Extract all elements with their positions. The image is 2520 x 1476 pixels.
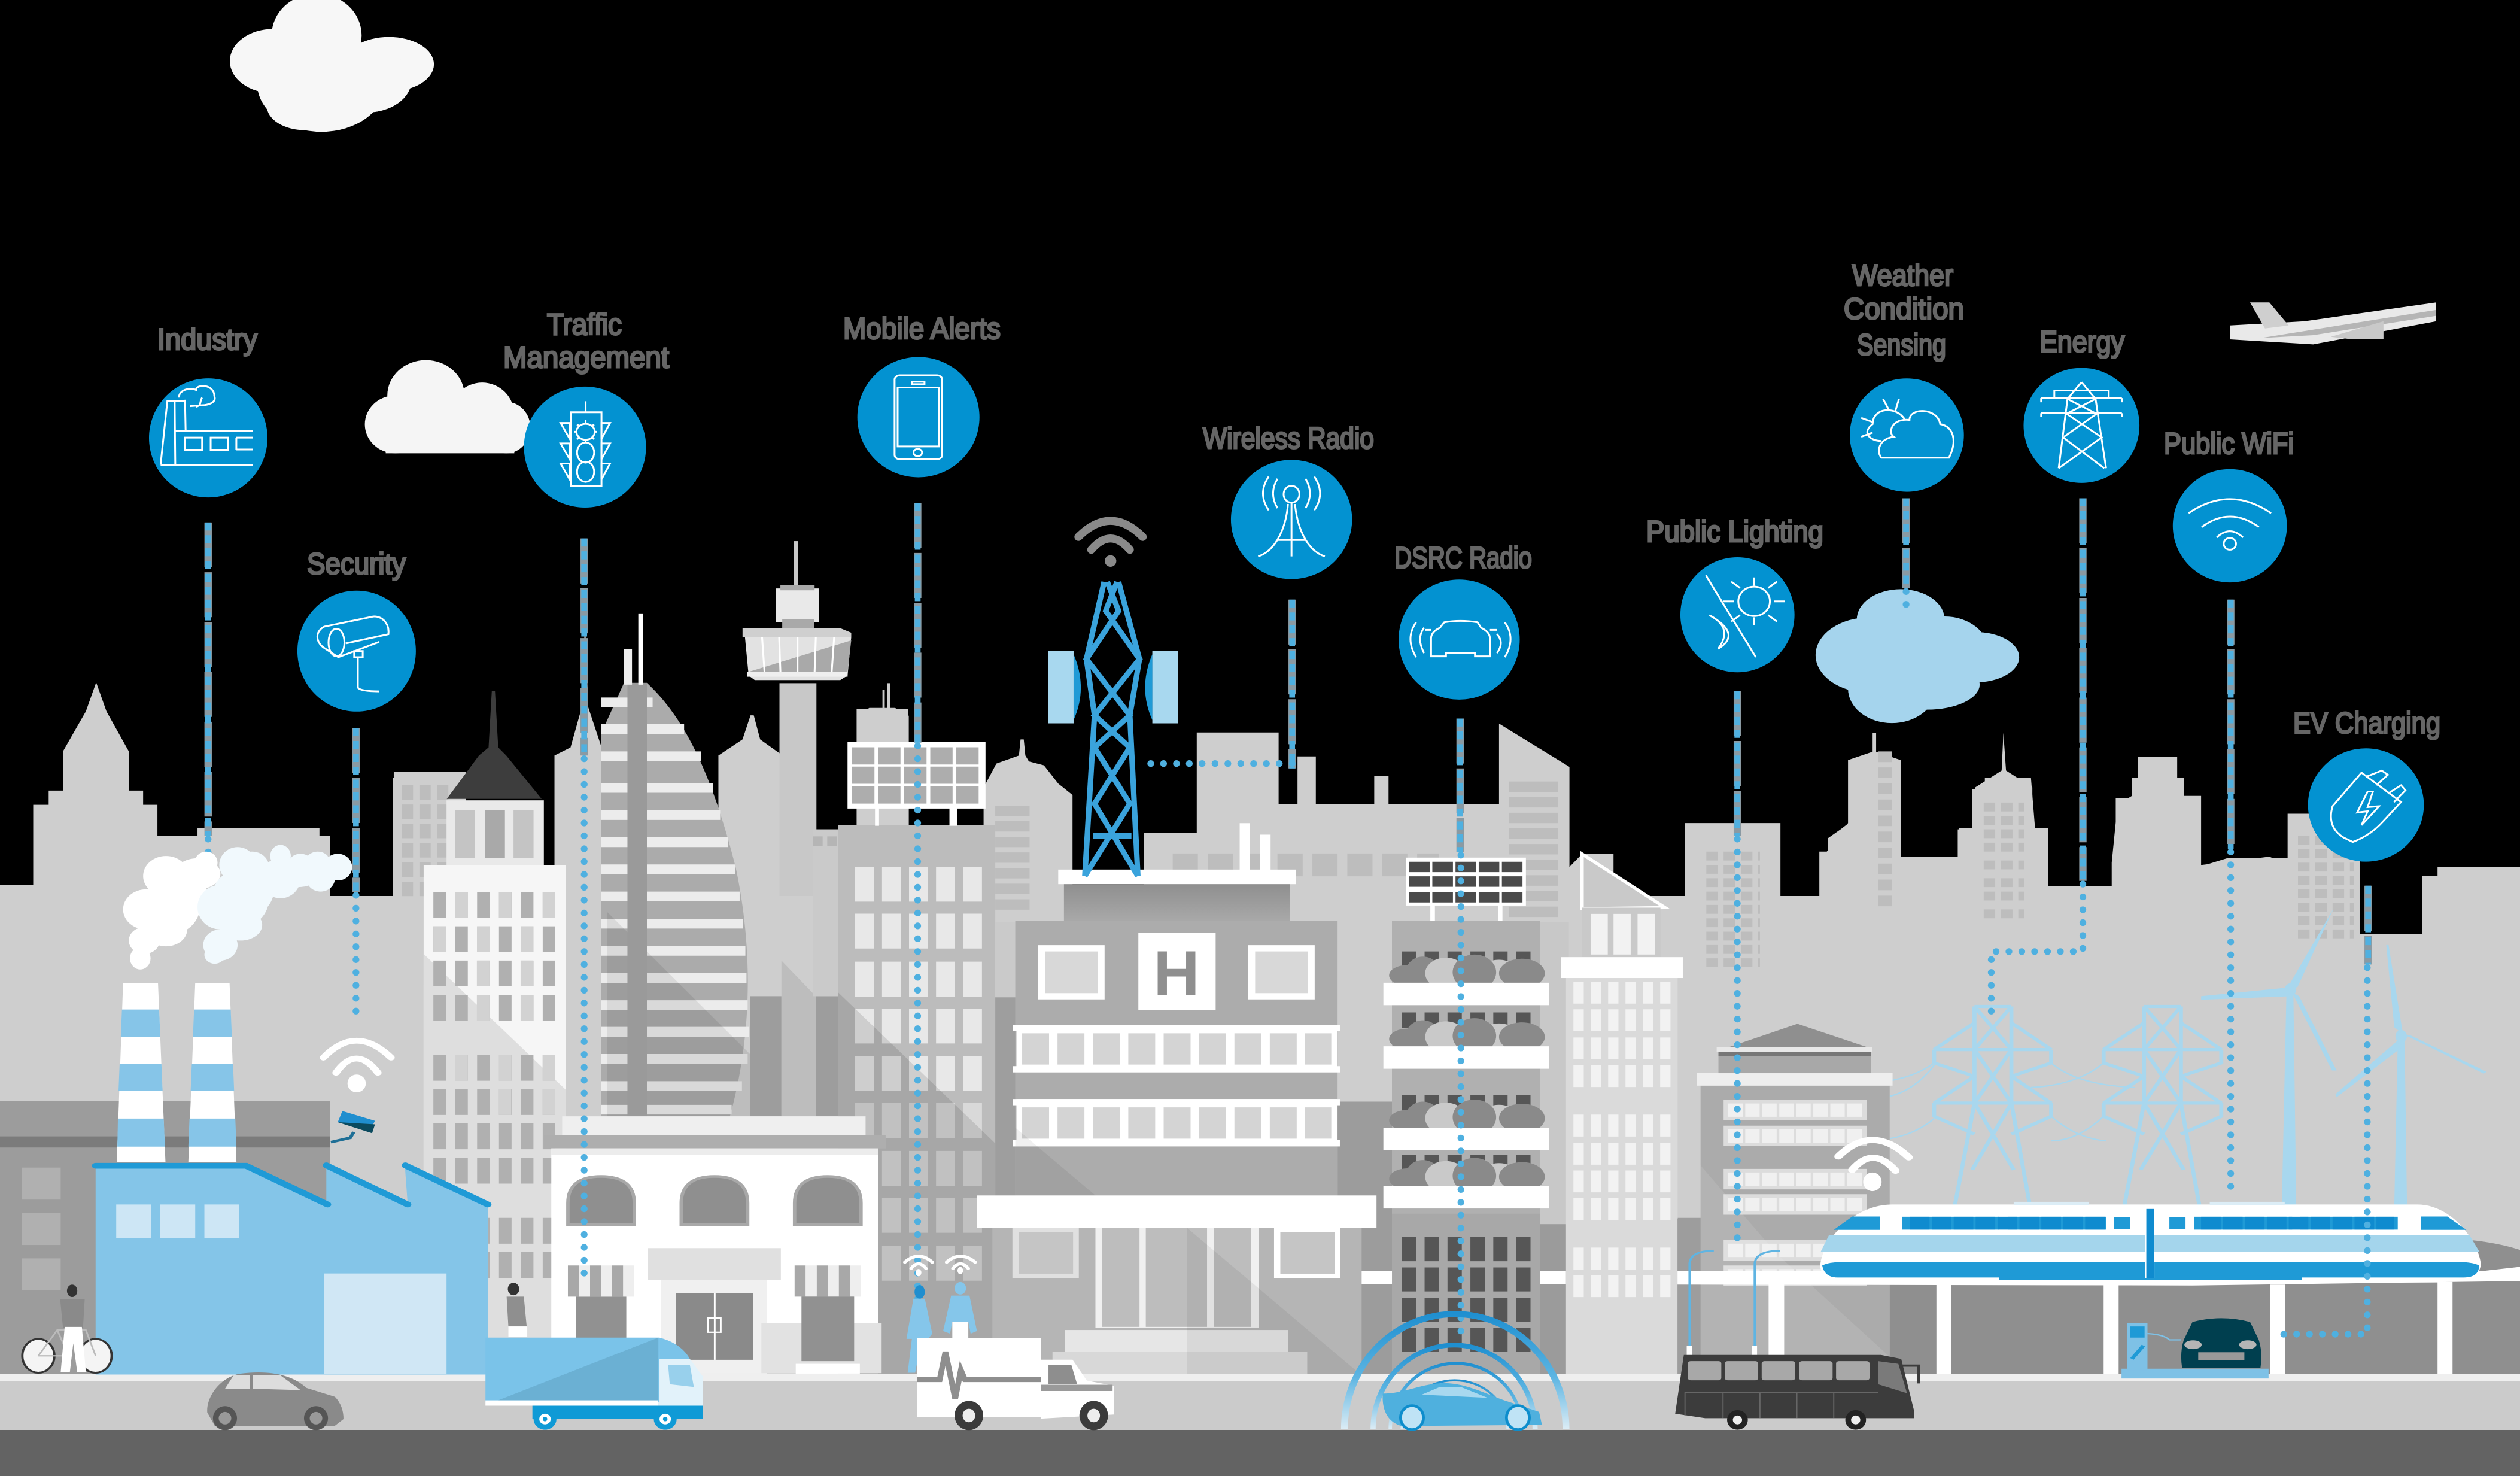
connector: Energy	[1991, 499, 2083, 1016]
icon: Energy	[2023, 368, 2139, 483]
antenna panels	[1048, 651, 1178, 724]
observation tower	[743, 541, 851, 680]
building: hospital	[977, 823, 1376, 1375]
label: Public WiFi: Public WiFi	[2164, 427, 2294, 460]
label: Energy: Energy	[2039, 325, 2124, 359]
label: Public Lighting: Public Lighting	[1646, 515, 1823, 548]
EV charging station	[2121, 1323, 2269, 1378]
icon: Traffic Management	[524, 387, 646, 508]
building: low grey block	[0, 1101, 330, 1377]
icon: Industry	[149, 378, 267, 497]
wind turbines	[2201, 908, 2486, 1205]
icon circles: left group	[149, 357, 980, 712]
delivery truck	[485, 1338, 703, 1430]
viaduct deck and pillars	[1677, 1267, 2520, 1377]
telecom tower on hospital	[1048, 521, 1178, 876]
icon: security camera	[331, 1111, 375, 1142]
person with bicycle	[22, 1284, 112, 1372]
label: Traffic Management	[503, 308, 669, 374]
label: EV Charging: EV Charging	[2293, 706, 2440, 740]
charging car	[2181, 1318, 2261, 1368]
building: white window tower	[424, 800, 566, 1374]
building: grey office with wifi	[1677, 1024, 1893, 1379]
icon: wifi on factory	[323, 1041, 391, 1092]
foreground centre	[905, 1256, 1566, 1430]
building: light pale tower	[1561, 854, 1683, 1375]
icon circles: right group	[1231, 368, 2424, 862]
dark roof of white tower	[447, 691, 542, 799]
pedestrian with bag	[507, 1283, 527, 1337]
label: Weather Condition Sensing: Weather	[1852, 259, 1953, 292]
transmission pylons	[1890, 1006, 2221, 1205]
building: curved striped skyscraper	[601, 614, 750, 1116]
label: Industry: Industry	[157, 323, 257, 356]
factory smoke	[123, 845, 352, 970]
label: DSRC Radio: DSRC Radio	[1394, 541, 1532, 575]
label: Traffic Management: Management	[503, 341, 669, 374]
road vehicles right	[1675, 1251, 2269, 1430]
mid-ground centre buildings	[838, 742, 1735, 1378]
label: Weather Condition Sensing: Sensing	[1857, 328, 1946, 362]
viaduct wall	[1890, 1239, 2520, 1381]
connector: DSRC Radio	[1460, 718, 1461, 1342]
mid-ground left buildings	[0, 614, 838, 1377]
hospital H sign: H	[1153, 937, 1200, 1009]
icon: Weather Condition Sensing	[1850, 378, 1964, 492]
connector: Weather Condition Sensing	[1905, 499, 1907, 611]
solar panel: office roof	[847, 742, 986, 826]
icon: Wireless Radio	[1231, 460, 1352, 579]
icon: Security	[297, 591, 416, 712]
right side infrastructure	[1677, 908, 2520, 1381]
icon: wifi over pedestrians	[905, 1256, 975, 1276]
label: Wireless Radio: Wireless Radio	[1203, 421, 1374, 455]
icon: Public WiFi	[2173, 469, 2287, 582]
label: Weather Condition Sensing	[1844, 259, 1964, 362]
building: green balcony tower	[1361, 858, 1566, 1375]
connector: Wireless Radio	[1144, 600, 1292, 769]
ground: pavement, road, asphalt	[0, 1374, 2520, 1476]
ambulance	[917, 1338, 1114, 1430]
cloud: blue weather cloud	[1816, 589, 2019, 723]
icon: DSRC Radio	[1399, 579, 1520, 700]
cloud: top left	[230, 0, 434, 132]
connector: Mobile Alerts	[916, 503, 919, 1310]
left foreground	[22, 983, 886, 1430]
cloud: middle	[365, 360, 530, 453]
connector: Industry	[206, 523, 209, 863]
connector lines	[208, 499, 2368, 1342]
blue car	[1382, 1383, 1542, 1429]
factory hall	[96, 1163, 488, 1374]
building: background dark slabs	[750, 830, 838, 1116]
grey car	[207, 1372, 344, 1430]
DSRC radio arcs	[1345, 1314, 1566, 1429]
icon: Mobile Alerts	[858, 357, 980, 477]
train	[1820, 1202, 2481, 1280]
building: tall grey office	[838, 825, 995, 1378]
label: Mobile Alerts: Mobile Alerts	[843, 312, 1001, 345]
far skyline silhouette	[0, 619, 2520, 1430]
label: Weather Condition Sensing: Condition	[1844, 292, 1964, 326]
connector: EV Charging	[2277, 886, 2368, 1334]
building: side slabs	[995, 922, 1735, 1378]
bus	[1675, 1355, 1919, 1430]
label: Security: Security	[307, 547, 406, 581]
connector: Public Lighting	[1736, 691, 1738, 1250]
icon: signal wifi	[1078, 521, 1142, 567]
street lamps	[1687, 1251, 1780, 1355]
connector: Public WiFi	[2229, 600, 2232, 1198]
label: Traffic Management: Traffic	[547, 308, 622, 341]
building: shop	[544, 1116, 886, 1374]
connector: Security	[355, 728, 357, 1018]
pedestrians: woman and man	[907, 1282, 977, 1373]
connector: Traffic Management	[583, 539, 586, 1286]
icon: EV Charging	[2308, 748, 2424, 862]
skyline windows	[402, 751, 2354, 963]
factory chimneys	[117, 983, 236, 1162]
icon: Public Lighting	[1680, 557, 1795, 672]
wifi on grey office	[1838, 1140, 1909, 1191]
airplane	[2230, 302, 2436, 344]
lattice mast	[1085, 582, 1139, 876]
